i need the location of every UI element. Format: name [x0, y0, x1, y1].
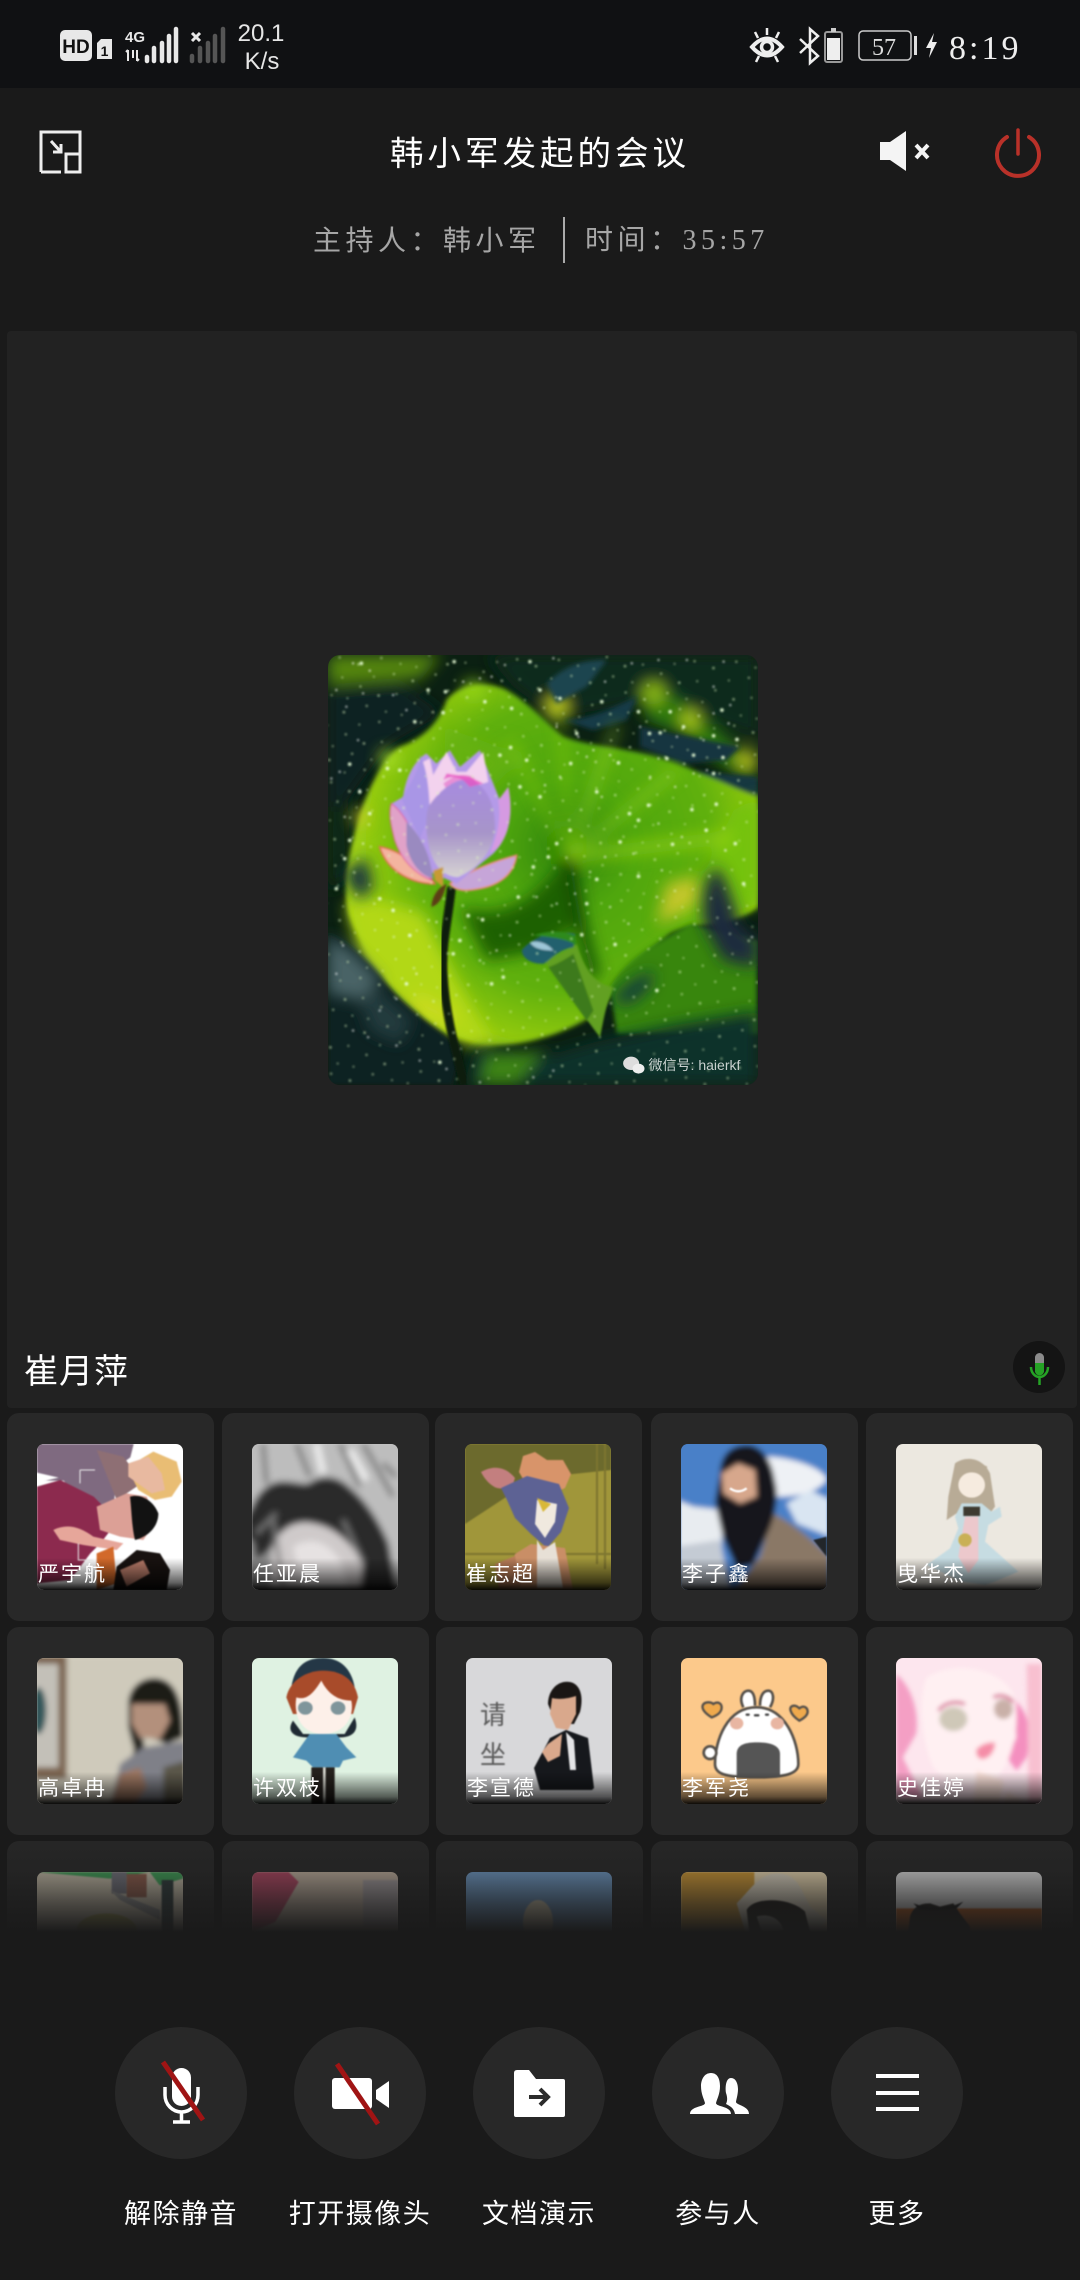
- button: unmute: [115, 2027, 247, 2159]
- button: camera off: [294, 2027, 426, 2159]
- name: 李子鑫: [682, 1563, 751, 1586]
- watermark: 微信号: haierkf: [648, 1057, 741, 1073]
- status bar: [0, 0, 1080, 88]
- avatar: hanfu girl drawing: [896, 1444, 1042, 1590]
- participant tile: partially hidden 13: [436, 1841, 643, 2049]
- avatar: woman and sky: [681, 1444, 827, 1590]
- avatar: rabbit onigiri sticker: [681, 1658, 827, 1804]
- icon: power: [994, 128, 1041, 178]
- name: 史佳婷: [897, 1777, 966, 1800]
- water droplets: [328, 655, 758, 1085]
- status icons: K/s: [245, 48, 279, 75]
- button: more: [831, 2027, 963, 2159]
- label: more: 更多: [868, 2199, 926, 2229]
- participant tile: 崔志超: [435, 1413, 642, 1621]
- icon: two people: [690, 2073, 749, 2114]
- title: 韩小军发起的会议: [390, 136, 690, 173]
- name: 曳华杰: [897, 1563, 966, 1586]
- status icons: [60, 20, 1021, 75]
- name: 许双枝: [253, 1777, 322, 1800]
- participant tile: 严宇航: [7, 1413, 214, 1621]
- icon: exit fullscreen: [40, 130, 82, 174]
- participant tile: partially hidden 12: [222, 1841, 429, 2049]
- avatar: chibi character: [252, 1658, 398, 1804]
- speaker name: 崔月萍: [24, 1353, 129, 1391]
- avatar: blue sky: [466, 1872, 612, 2018]
- avatar: hat: [681, 1872, 827, 2018]
- background foliage: [328, 655, 758, 894]
- status icons: 8:19: [949, 30, 1021, 67]
- participant tile: 李宣德: [436, 1627, 643, 1835]
- participant tile: partially hidden 15: [866, 1841, 1073, 2049]
- avatar: cartoon cat: [465, 1444, 611, 1590]
- label: participants: 参与人: [675, 2199, 761, 2229]
- avatar: man in suit: 请: [480, 1700, 506, 1730]
- status icons: HD: [62, 37, 90, 58]
- avatar: grey hair photo: [252, 1444, 398, 1590]
- participant tile: 高卓冉: [7, 1627, 214, 1835]
- status icons: 4G: [125, 29, 145, 46]
- lotus photo: [328, 655, 758, 1085]
- participant tile: 史佳婷: [866, 1627, 1073, 1835]
- participant tile: 李军尧: [651, 1627, 858, 1835]
- participant tile: 许双枝: [222, 1627, 429, 1835]
- avatar: dark hair on orange: [896, 1872, 1042, 2018]
- avatar: pink shape: [252, 1872, 398, 2018]
- avatar: manga trio: [37, 1444, 183, 1590]
- avatar: pink anime girl: [896, 1658, 1042, 1804]
- button: documents: [473, 2027, 605, 2159]
- participant tile: partially hidden 11: [7, 1841, 214, 2049]
- icon: folder with arrow: [514, 2070, 565, 2117]
- time label: 时间：35:57: [585, 225, 769, 256]
- name: 李军尧: [682, 1777, 751, 1800]
- panel: bottom toolbar: [0, 1932, 1080, 2280]
- status icons: 20.1: [238, 20, 284, 47]
- label: unmute: 解除静音: [124, 2199, 238, 2229]
- icon: speaker muted: [880, 131, 930, 171]
- panel: active speaker: [7, 331, 1077, 1408]
- icon: speaker mic: [1013, 1341, 1065, 1393]
- avatar: street scene: [37, 1872, 183, 2018]
- main lotus leaf: [346, 684, 758, 1046]
- host and time: [313, 217, 769, 263]
- participant tile: partially hidden 14: [651, 1841, 858, 2049]
- participant tile: 任亚晨: [222, 1413, 429, 1621]
- icon: muted microphone: [161, 2060, 205, 2124]
- stem: [443, 887, 465, 1085]
- icon: menu lines: [876, 2074, 919, 2111]
- flower: [380, 750, 517, 907]
- host label: 主持人：韩小军: [313, 225, 541, 256]
- participant tile: 曳华杰: [866, 1413, 1073, 1621]
- small furled leaf: [522, 932, 613, 1037]
- label: open camera: 打开摄像头: [289, 2199, 431, 2229]
- name: 李宣德: [467, 1777, 536, 1800]
- label: document presentation: 文档演示: [482, 2199, 596, 2229]
- name: 高卓冉: [38, 1777, 107, 1800]
- button: participants: [652, 2027, 784, 2159]
- name: 任亚晨: [253, 1563, 322, 1586]
- status icons: 1: [101, 43, 109, 59]
- participant tile: 李子鑫: [651, 1413, 858, 1621]
- avatar: girl with glasses: [37, 1658, 183, 1804]
- icon: crossed-out camera: [332, 2062, 389, 2126]
- name: 严宇航: [38, 1563, 107, 1586]
- name: 崔志超: [466, 1563, 535, 1586]
- status icons: 57: [872, 35, 896, 61]
- avatar: man in suit: 坐: [480, 1740, 506, 1770]
- avatar: man in suit: [466, 1658, 612, 1804]
